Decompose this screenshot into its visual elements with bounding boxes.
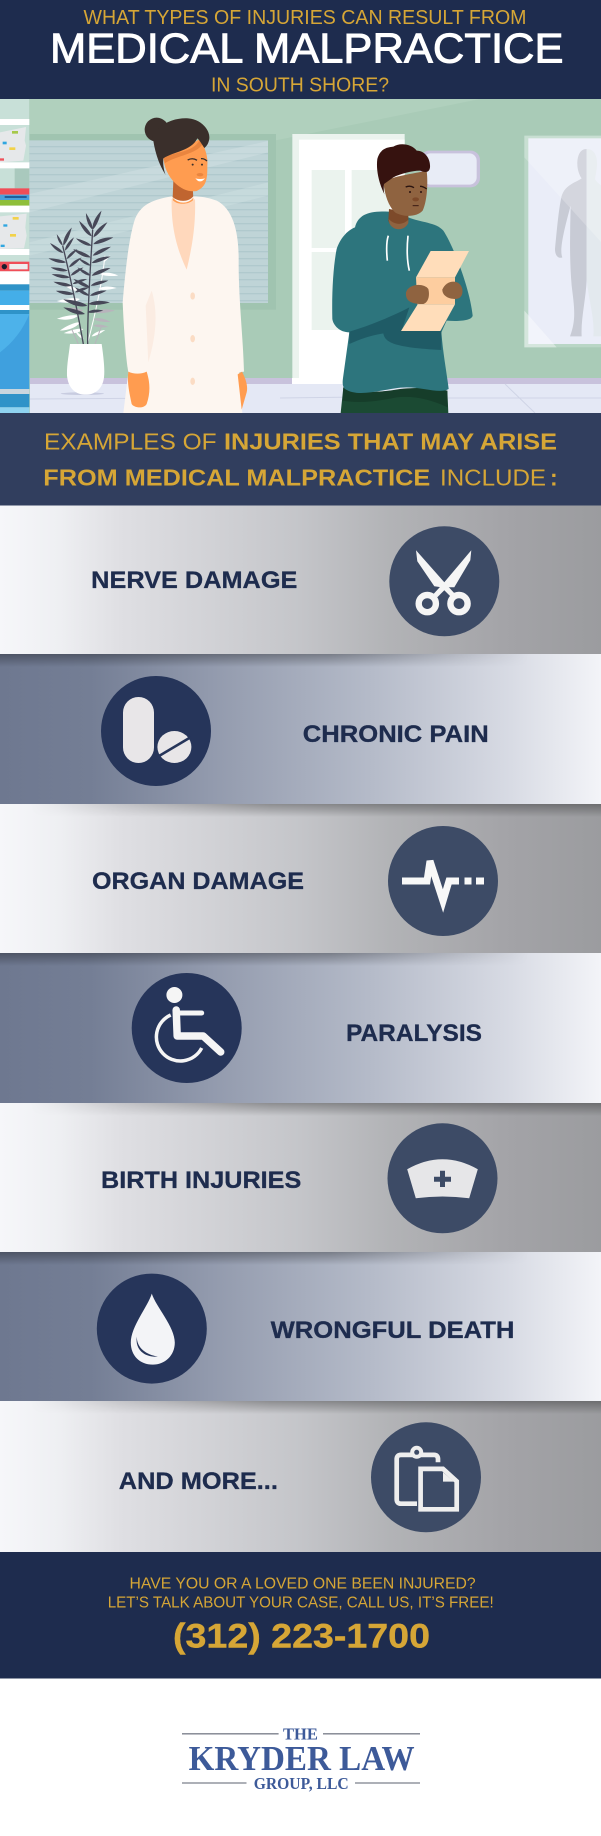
patient reading paper xyxy=(332,144,473,413)
phone number: (312) 223-1700 xyxy=(173,1617,430,1655)
sub-heading line two: : xyxy=(550,464,558,490)
heading line: location: IN SOUTH SHORE? xyxy=(211,74,389,96)
icon: wheelchair xyxy=(132,973,242,1083)
call to action text xyxy=(108,1576,494,1612)
call to action text: HAVE YOU OR A LOVED ONE BEEN INJURED? xyxy=(130,1576,476,1593)
main title: MEDICAL MALPRACTICE xyxy=(50,25,564,72)
sub-heading line one: INJURIES THAT MAY ARISE xyxy=(224,428,557,454)
label: NERVE DAMAGE xyxy=(91,567,297,594)
sub-heading line one: EXAMPLES OF xyxy=(44,428,217,454)
sub-heading line two xyxy=(43,464,558,490)
label: ORGAN DAMAGE xyxy=(92,868,304,895)
row: organ damage xyxy=(0,804,601,953)
row: chronic pain xyxy=(0,654,601,804)
row: paralysis xyxy=(0,953,601,1103)
heading line: what types of injuries: WHAT TYPES OF INJURIES CAN RESULT FROM xyxy=(84,7,526,29)
sub-banner: examples xyxy=(0,413,601,506)
label: WRONGFUL DEATH xyxy=(271,1317,514,1344)
floor xyxy=(30,378,601,413)
label: AND MORE... xyxy=(119,1468,278,1495)
sub-heading line one xyxy=(44,428,557,454)
row: birth injuries xyxy=(0,1103,601,1252)
row: nerve damage xyxy=(0,506,601,654)
sub-heading line two: FROM MEDICAL MALPRACTICE xyxy=(43,464,430,490)
window with blinds xyxy=(29,134,276,310)
call to action text: LET’S TALK ABOUT YOUR CASE, CALL US, IT’S FREE! xyxy=(108,1594,494,1612)
illustration: doctor and patient in clinic xyxy=(0,99,601,413)
logo: The Kryder Law Group: GROUP, LLC xyxy=(254,1774,349,1793)
logo: The Kryder Law Group: THE xyxy=(283,1724,318,1743)
label: PARALYSIS xyxy=(346,1020,482,1047)
door, sign and anatomy poster xyxy=(292,134,601,387)
icon: blood drop xyxy=(97,1274,207,1384)
doctor in white coat xyxy=(123,118,247,413)
icon: clipboard and document xyxy=(371,1422,481,1532)
icon: pills xyxy=(101,676,211,786)
footer call to action xyxy=(0,1552,601,1678)
row: wrongful death xyxy=(0,1252,601,1401)
icon: scissors xyxy=(389,526,499,636)
row: and more xyxy=(0,1401,601,1552)
label: BIRTH INJURIES xyxy=(101,1167,301,1194)
label: CHRONIC PAIN xyxy=(303,721,489,748)
logo: The Kryder Law Group: KRYDER LAW xyxy=(189,1739,415,1778)
plant in white pot xyxy=(48,210,118,395)
icon: nurse cap xyxy=(388,1123,498,1233)
logo: The Kryder Law Group xyxy=(182,1724,420,1793)
icon: pulse line xyxy=(388,826,498,936)
header panel xyxy=(0,0,601,100)
shelf cabinet xyxy=(0,99,29,413)
sub-heading line two: INCLUDE xyxy=(440,464,546,490)
